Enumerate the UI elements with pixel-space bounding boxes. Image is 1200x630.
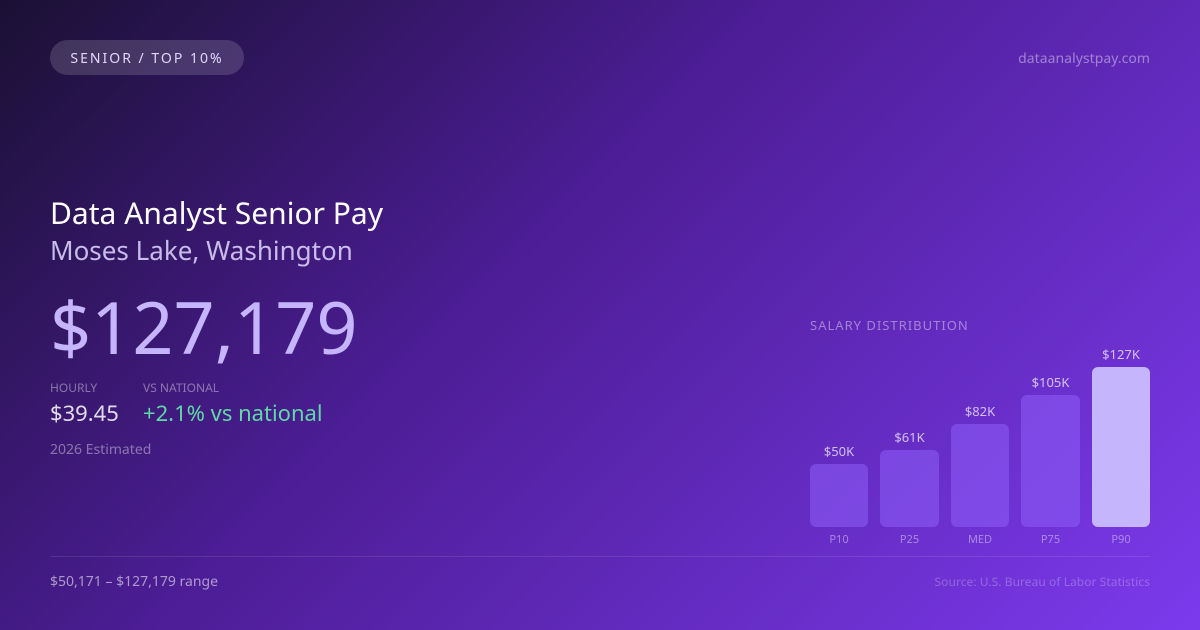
value P75: $105K	[1032, 373, 1069, 391]
chart: salary distribution	[810, 316, 1150, 547]
hourly label: HOURLY	[50, 379, 97, 396]
label P75: P75	[1041, 532, 1060, 547]
label median: MED	[968, 532, 992, 547]
headline salary: $127,179	[50, 278, 358, 376]
source: Source: U.S. Bureau of Labor Statistics	[935, 573, 1150, 590]
badge: seniority: SENIOR / TOP 10%	[70, 49, 224, 68]
title: Data Analyst Senior Pay	[50, 192, 383, 233]
label P10: P10	[829, 532, 849, 547]
estimate note: 2026 Estimated	[50, 440, 151, 459]
badge: seniority	[50, 40, 244, 75]
salary range: $50,171 – $127,179 range	[50, 572, 218, 591]
vs national label: VS NATIONAL	[143, 379, 219, 396]
value median: $82K	[965, 402, 995, 420]
label P90: P90	[1111, 532, 1131, 547]
site domain: dataanalystpay.com	[1018, 49, 1150, 68]
bar P75	[1021, 395, 1080, 527]
value P25: $61K	[894, 428, 925, 446]
value P90: $127K	[1102, 345, 1140, 363]
bar median	[951, 424, 1009, 527]
hourly value: $39.45	[50, 398, 119, 428]
chart heading: SALARY DISTRIBUTION	[810, 316, 969, 334]
bar P90	[1092, 367, 1150, 527]
vs national value: +2.1% vs national	[143, 398, 323, 428]
stat: hourly	[50, 379, 119, 428]
bar P10	[810, 464, 868, 527]
stat: vs national	[143, 379, 323, 428]
label P25: P25	[900, 532, 919, 547]
subtitle: location: Moses Lake, Washington	[50, 232, 353, 268]
value P10: $50K	[824, 442, 854, 460]
bar P25	[880, 450, 939, 527]
